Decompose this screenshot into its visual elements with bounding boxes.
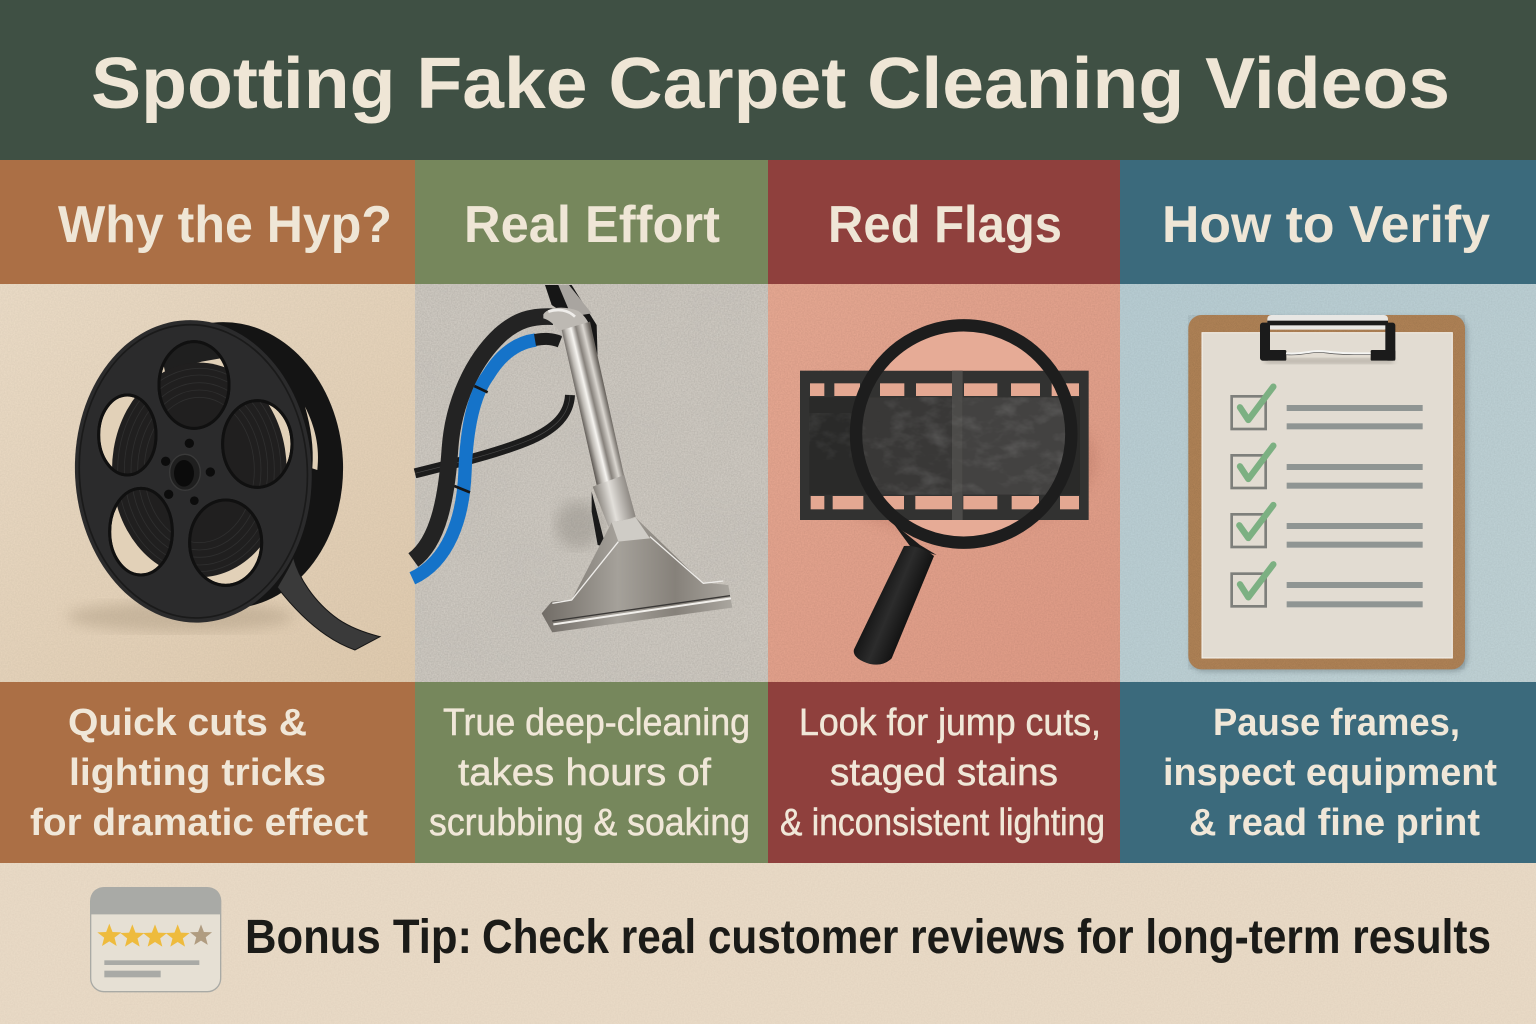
icon: review card with stars xyxy=(91,888,221,992)
heading: why the hype: Why the Hyp? xyxy=(58,196,392,254)
caption: why the hype xyxy=(0,682,415,863)
heading: how to verify: How to Verify xyxy=(1162,196,1490,254)
heading: red flags: Red Flags xyxy=(828,196,1062,254)
caption: red flags: staged stains xyxy=(830,752,1058,794)
heading: red flags xyxy=(768,160,1120,284)
heading: real effort: Real Effort xyxy=(464,196,720,254)
caption: why the hype: lighting tricks xyxy=(69,752,326,794)
caption: why the hype: Quick cuts & xyxy=(68,702,307,744)
caption: red flags xyxy=(768,682,1120,863)
film strip xyxy=(800,371,1089,520)
caption: why the hype: for dramatic effect xyxy=(30,802,368,844)
caption: how to verify: & read fine print xyxy=(1189,802,1480,844)
checklist row 4 xyxy=(1232,564,1423,607)
caption: how to verify xyxy=(1120,682,1536,863)
panel: how to verify xyxy=(1120,160,1536,863)
lens rim xyxy=(856,325,1071,543)
bonus tip bar xyxy=(0,863,1536,1024)
clipboard clip xyxy=(1260,315,1395,364)
checklist row 1 xyxy=(1232,387,1423,429)
reel hub xyxy=(161,439,215,505)
panel: red flags xyxy=(768,160,1120,863)
film strip tail xyxy=(277,557,380,650)
caption: real effort: takes hours of xyxy=(458,752,711,794)
checklist row 3 xyxy=(1232,505,1423,548)
caption: real effort: scrubbing & soaking xyxy=(429,802,750,844)
icon: film reel xyxy=(67,314,380,650)
panel: why the hype xyxy=(0,160,415,863)
heading: how to verify xyxy=(1120,160,1536,284)
title banner xyxy=(0,0,1536,160)
caption: red flags: & inconsistent lighting xyxy=(780,802,1105,844)
icon: magnifying glass over film strip xyxy=(800,325,1097,665)
checklist row 2 xyxy=(1232,446,1423,489)
heading: real effort xyxy=(415,160,768,284)
caption: red flags: Look for jump cuts, xyxy=(799,702,1101,744)
panel: real effort xyxy=(412,160,768,863)
caption: real effort: True deep-cleaning xyxy=(443,702,750,744)
bonus tip text: Bonus Tip: xyxy=(245,911,472,964)
icon: carpet cleaning wand with hoses xyxy=(412,285,732,632)
icon: clipboard checklist xyxy=(1188,315,1467,672)
caption: real effort xyxy=(415,682,768,863)
caption: how to verify: Pause frames, xyxy=(1213,702,1460,744)
lens handle xyxy=(854,523,937,665)
title: Spotting Fake Carpet Cleaning Videos xyxy=(91,44,1450,124)
lens view xyxy=(860,330,1073,540)
heading: why the hype xyxy=(0,160,415,284)
caption: how to verify: inspect equipment xyxy=(1163,752,1497,794)
